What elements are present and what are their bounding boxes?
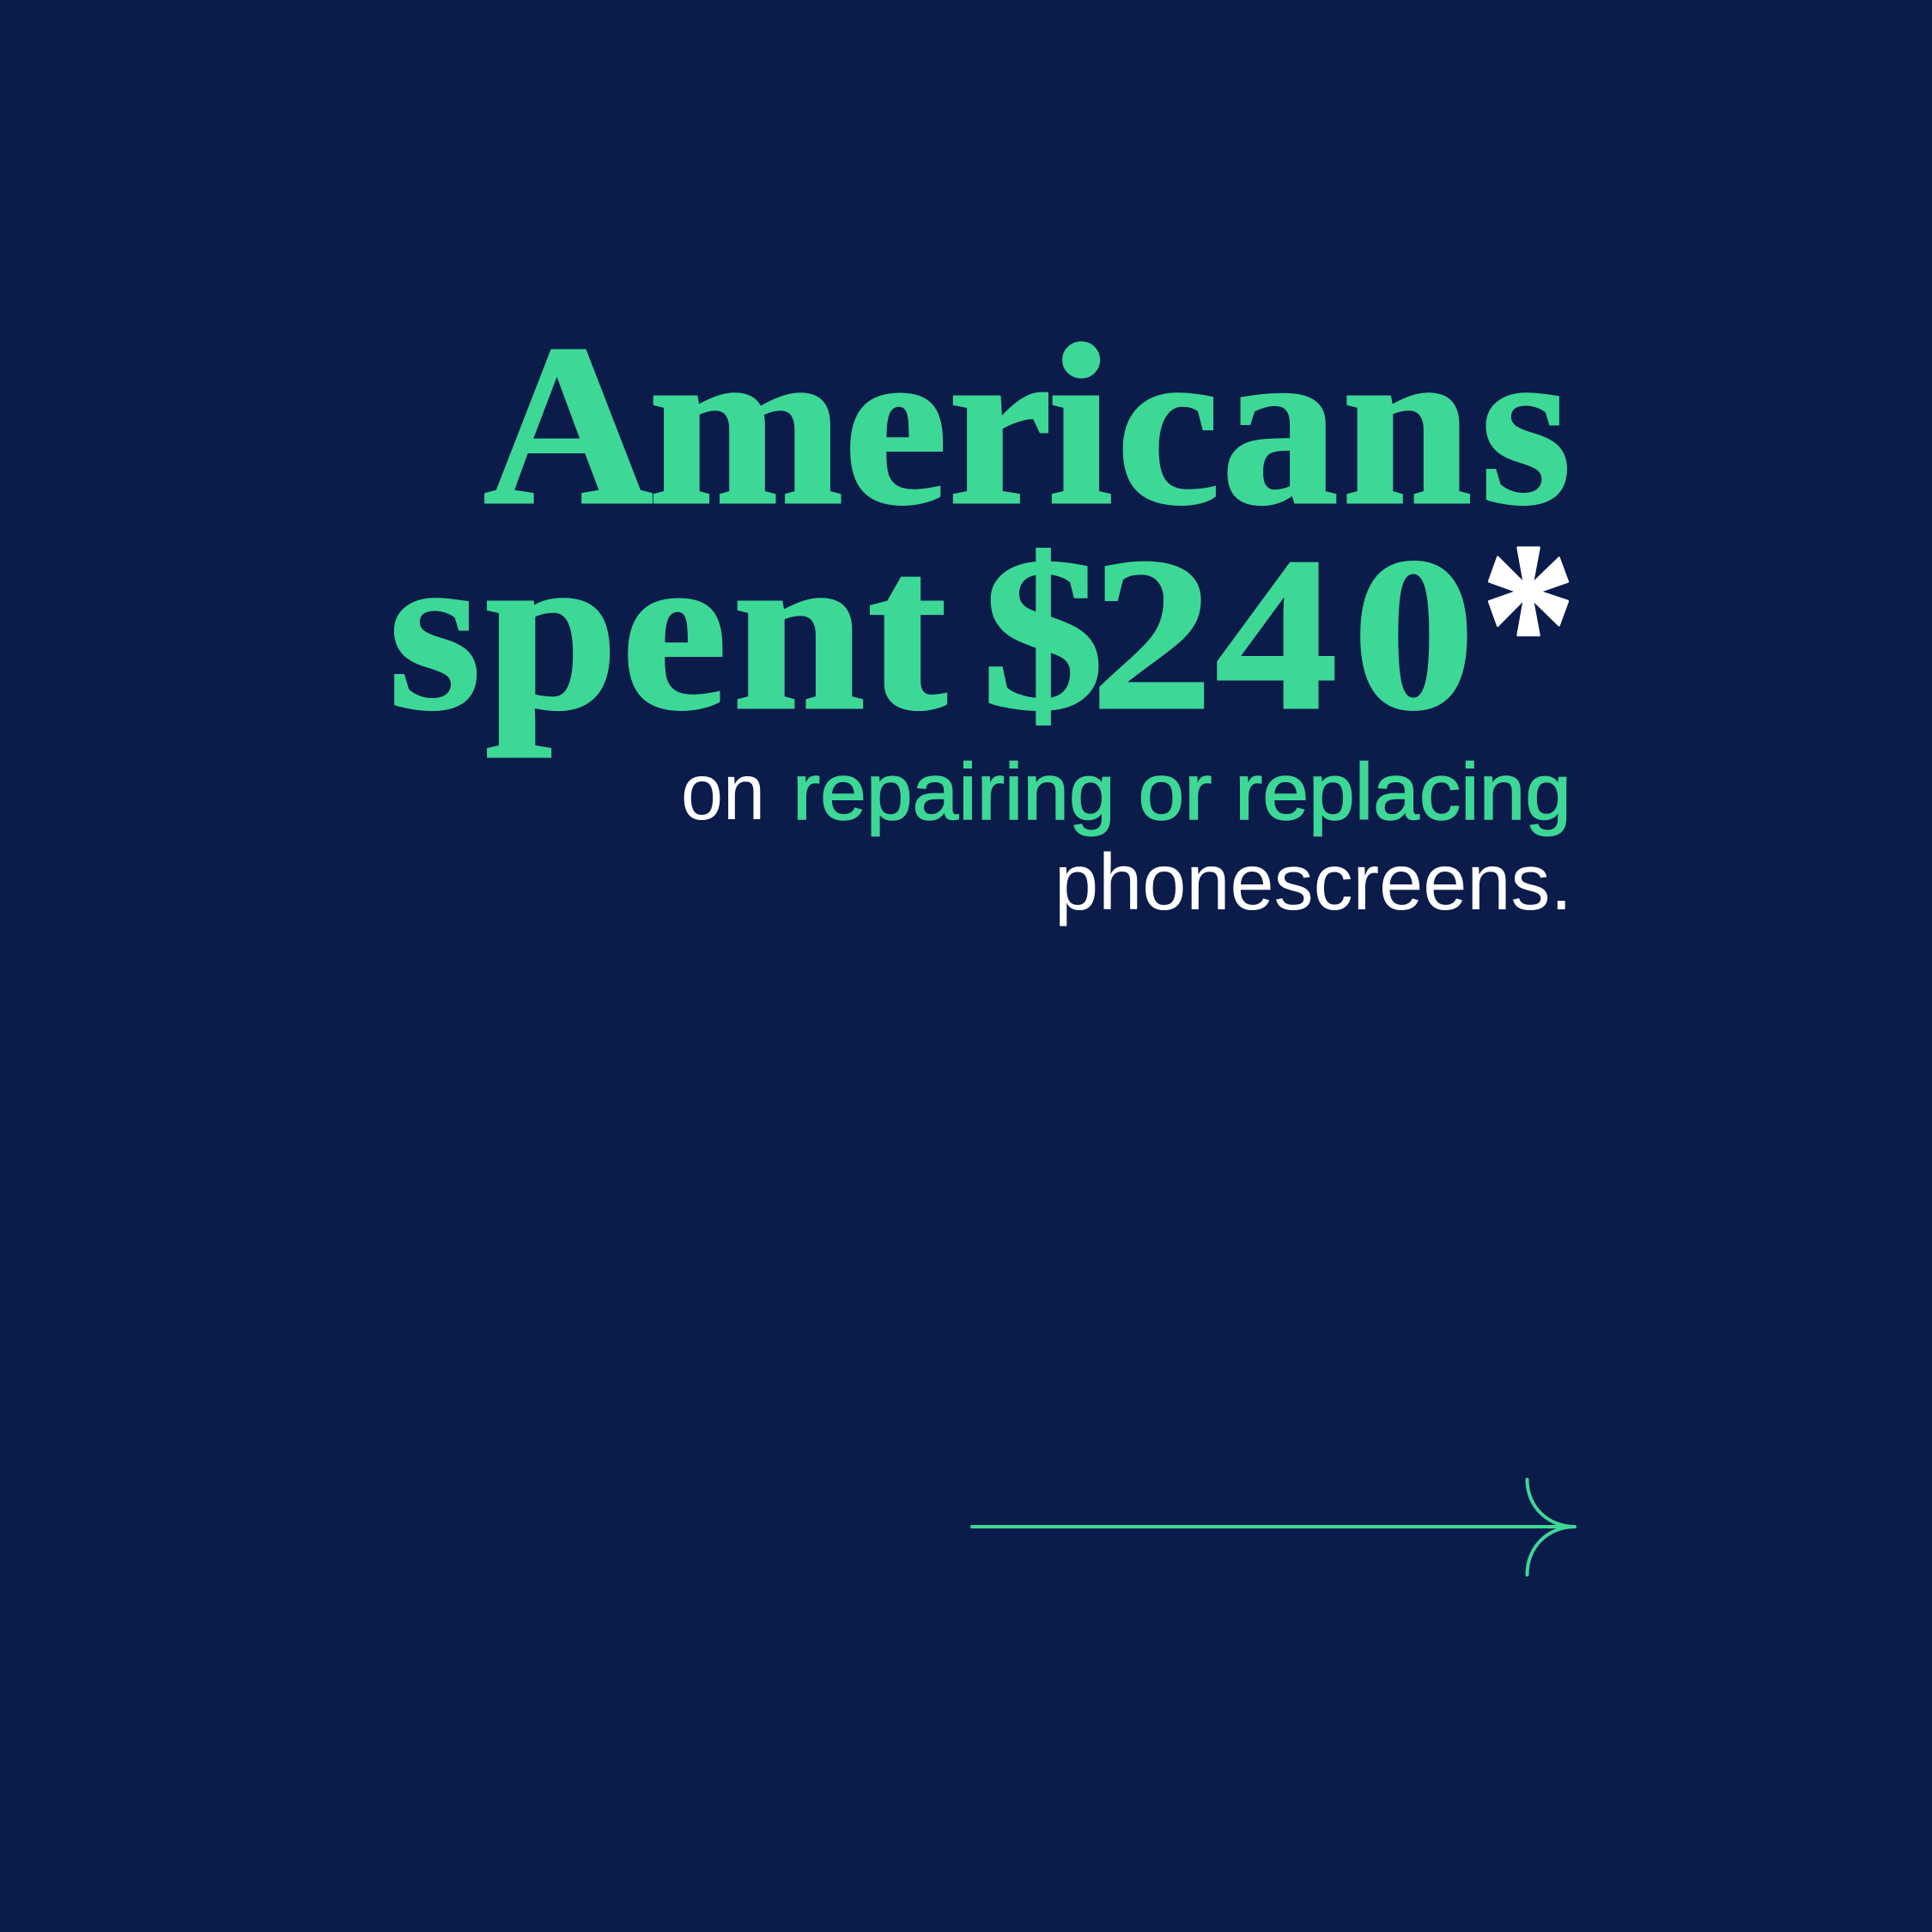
headline: [388, 297, 1576, 758]
subheading: [681, 747, 1572, 927]
headline line 1: Americans: [483, 297, 1571, 552]
word: phonescreens: phonescreens.: [1054, 837, 1572, 927]
highlighted phrase: repairing or replacing: [793, 747, 1571, 836]
word: on: on: [681, 747, 765, 836]
arrow: [972, 1479, 1575, 1575]
asterisk: *: [1481, 495, 1576, 751]
headline line 2: spent: spent: [388, 503, 950, 758]
headline line 2: amount: $240: [981, 513, 1475, 756]
